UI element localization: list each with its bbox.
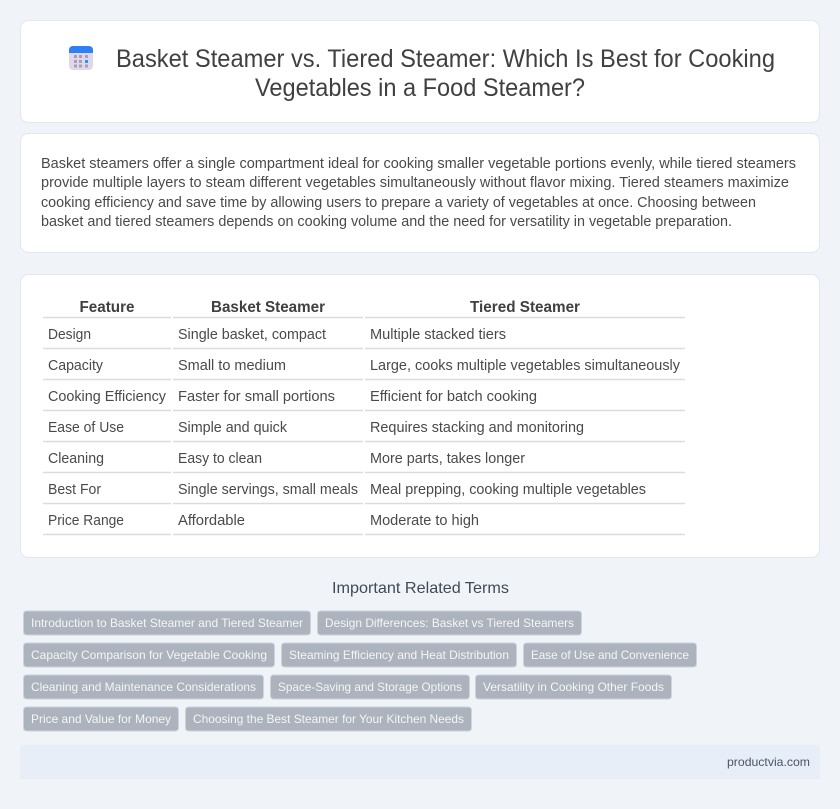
related term tags: Choosing the Best Steamer for Your Kitchen Needs bbox=[193, 712, 464, 726]
row: ease of use: Ease of Use bbox=[48, 420, 124, 436]
row: design: Multiple stacked tiers bbox=[370, 327, 506, 343]
row: best for: Single servings, small meals bbox=[178, 482, 358, 498]
row: price range: Moderate to high bbox=[370, 513, 479, 529]
icon: calendar grid bbox=[69, 46, 93, 70]
table rules bbox=[43, 318, 685, 534]
row: best for: Best For bbox=[48, 482, 101, 498]
row: cooking efficiency: Cooking Efficiency bbox=[48, 389, 167, 405]
related term tags: Price and Value for Money bbox=[31, 712, 171, 726]
row: cooking efficiency: Efficient for batch cooking bbox=[370, 389, 537, 405]
related term tags: Cleaning and Maintenance Considerations bbox=[31, 680, 256, 694]
row: design: Design bbox=[48, 327, 91, 343]
row: design bbox=[48, 327, 506, 343]
footer bar: productvia.com bbox=[727, 755, 810, 769]
related term tags: Ease of Use and Convenience bbox=[531, 648, 689, 662]
panel: comparison table bbox=[20, 274, 820, 558]
summary paragraph: provide multiple layers to steam different vegetables simultaneously without flavor mixing. Tiered steamers maximize bbox=[41, 175, 789, 191]
row: capacity bbox=[48, 358, 681, 374]
row: ease of use: Requires stacking and monitoring bbox=[370, 420, 584, 436]
panel: summary text bbox=[20, 134, 820, 252]
summary paragraph: cooking efficiency and save time by allowing users to prepare a variety of vegetables at once. Choosing between bbox=[41, 195, 756, 211]
row: cleaning bbox=[48, 451, 525, 467]
related term tags: Space-Saving and Storage Options bbox=[278, 680, 462, 694]
summary paragraph bbox=[41, 156, 796, 230]
table header row: Basket Steamer bbox=[211, 299, 325, 316]
related term tags: Introduction to Basket Steamer and Tiered Steamer bbox=[31, 616, 303, 630]
row: capacity: Capacity bbox=[48, 358, 104, 374]
panel: header bbox=[20, 20, 820, 122]
title bbox=[116, 45, 775, 102]
heading: related terms: Important Related Terms bbox=[332, 580, 509, 597]
row: ease of use bbox=[48, 420, 584, 436]
related term tags: Capacity Comparison for Vegetable Cooking bbox=[31, 648, 267, 662]
row: cleaning: More parts, takes longer bbox=[370, 451, 525, 467]
row: cleaning: Easy to clean bbox=[178, 451, 262, 467]
row: design: Single basket, compact bbox=[178, 327, 326, 343]
related term tags: Design Differences: Basket vs Tiered Steamers bbox=[325, 616, 574, 630]
title: Vegetables in a Food Steamer? bbox=[255, 74, 585, 102]
row: cleaning: Cleaning bbox=[48, 451, 104, 467]
table header row: Feature bbox=[80, 299, 135, 316]
footer bar bbox=[20, 745, 820, 779]
related term tags: Versatility in Cooking Other Foods bbox=[483, 680, 664, 694]
row: price range: Price Range bbox=[48, 513, 124, 529]
title: Basket Steamer vs. Tiered Steamer: Which Is Best for Cooking bbox=[116, 45, 775, 73]
related term tags: Steaming Efficiency and Heat Distribution bbox=[289, 648, 509, 662]
row: ease of use: Simple and quick bbox=[178, 420, 288, 436]
row: cooking efficiency bbox=[48, 389, 537, 405]
row: capacity: Large, cooks multiple vegetables simultaneously bbox=[370, 358, 681, 374]
row: cooking efficiency: Faster for small portions bbox=[178, 389, 335, 405]
row: price range: Affordable bbox=[178, 513, 245, 529]
table header row bbox=[80, 299, 580, 316]
row: best for: Meal prepping, cooking multiple vegetables bbox=[370, 482, 646, 498]
table header row: Tiered Steamer bbox=[470, 299, 580, 316]
summary paragraph: basket and tiered steamers depends on cooking volume and the need for versatility in vegetable preparation. bbox=[41, 214, 732, 230]
related term tags bbox=[24, 611, 696, 731]
row: capacity: Small to medium bbox=[178, 358, 286, 374]
row: price range bbox=[48, 513, 479, 529]
row: best for bbox=[48, 482, 646, 498]
summary paragraph: Basket steamers offer a single compartment ideal for cooking smaller vegetable portions evenly, while tiered steamers bbox=[41, 156, 796, 172]
